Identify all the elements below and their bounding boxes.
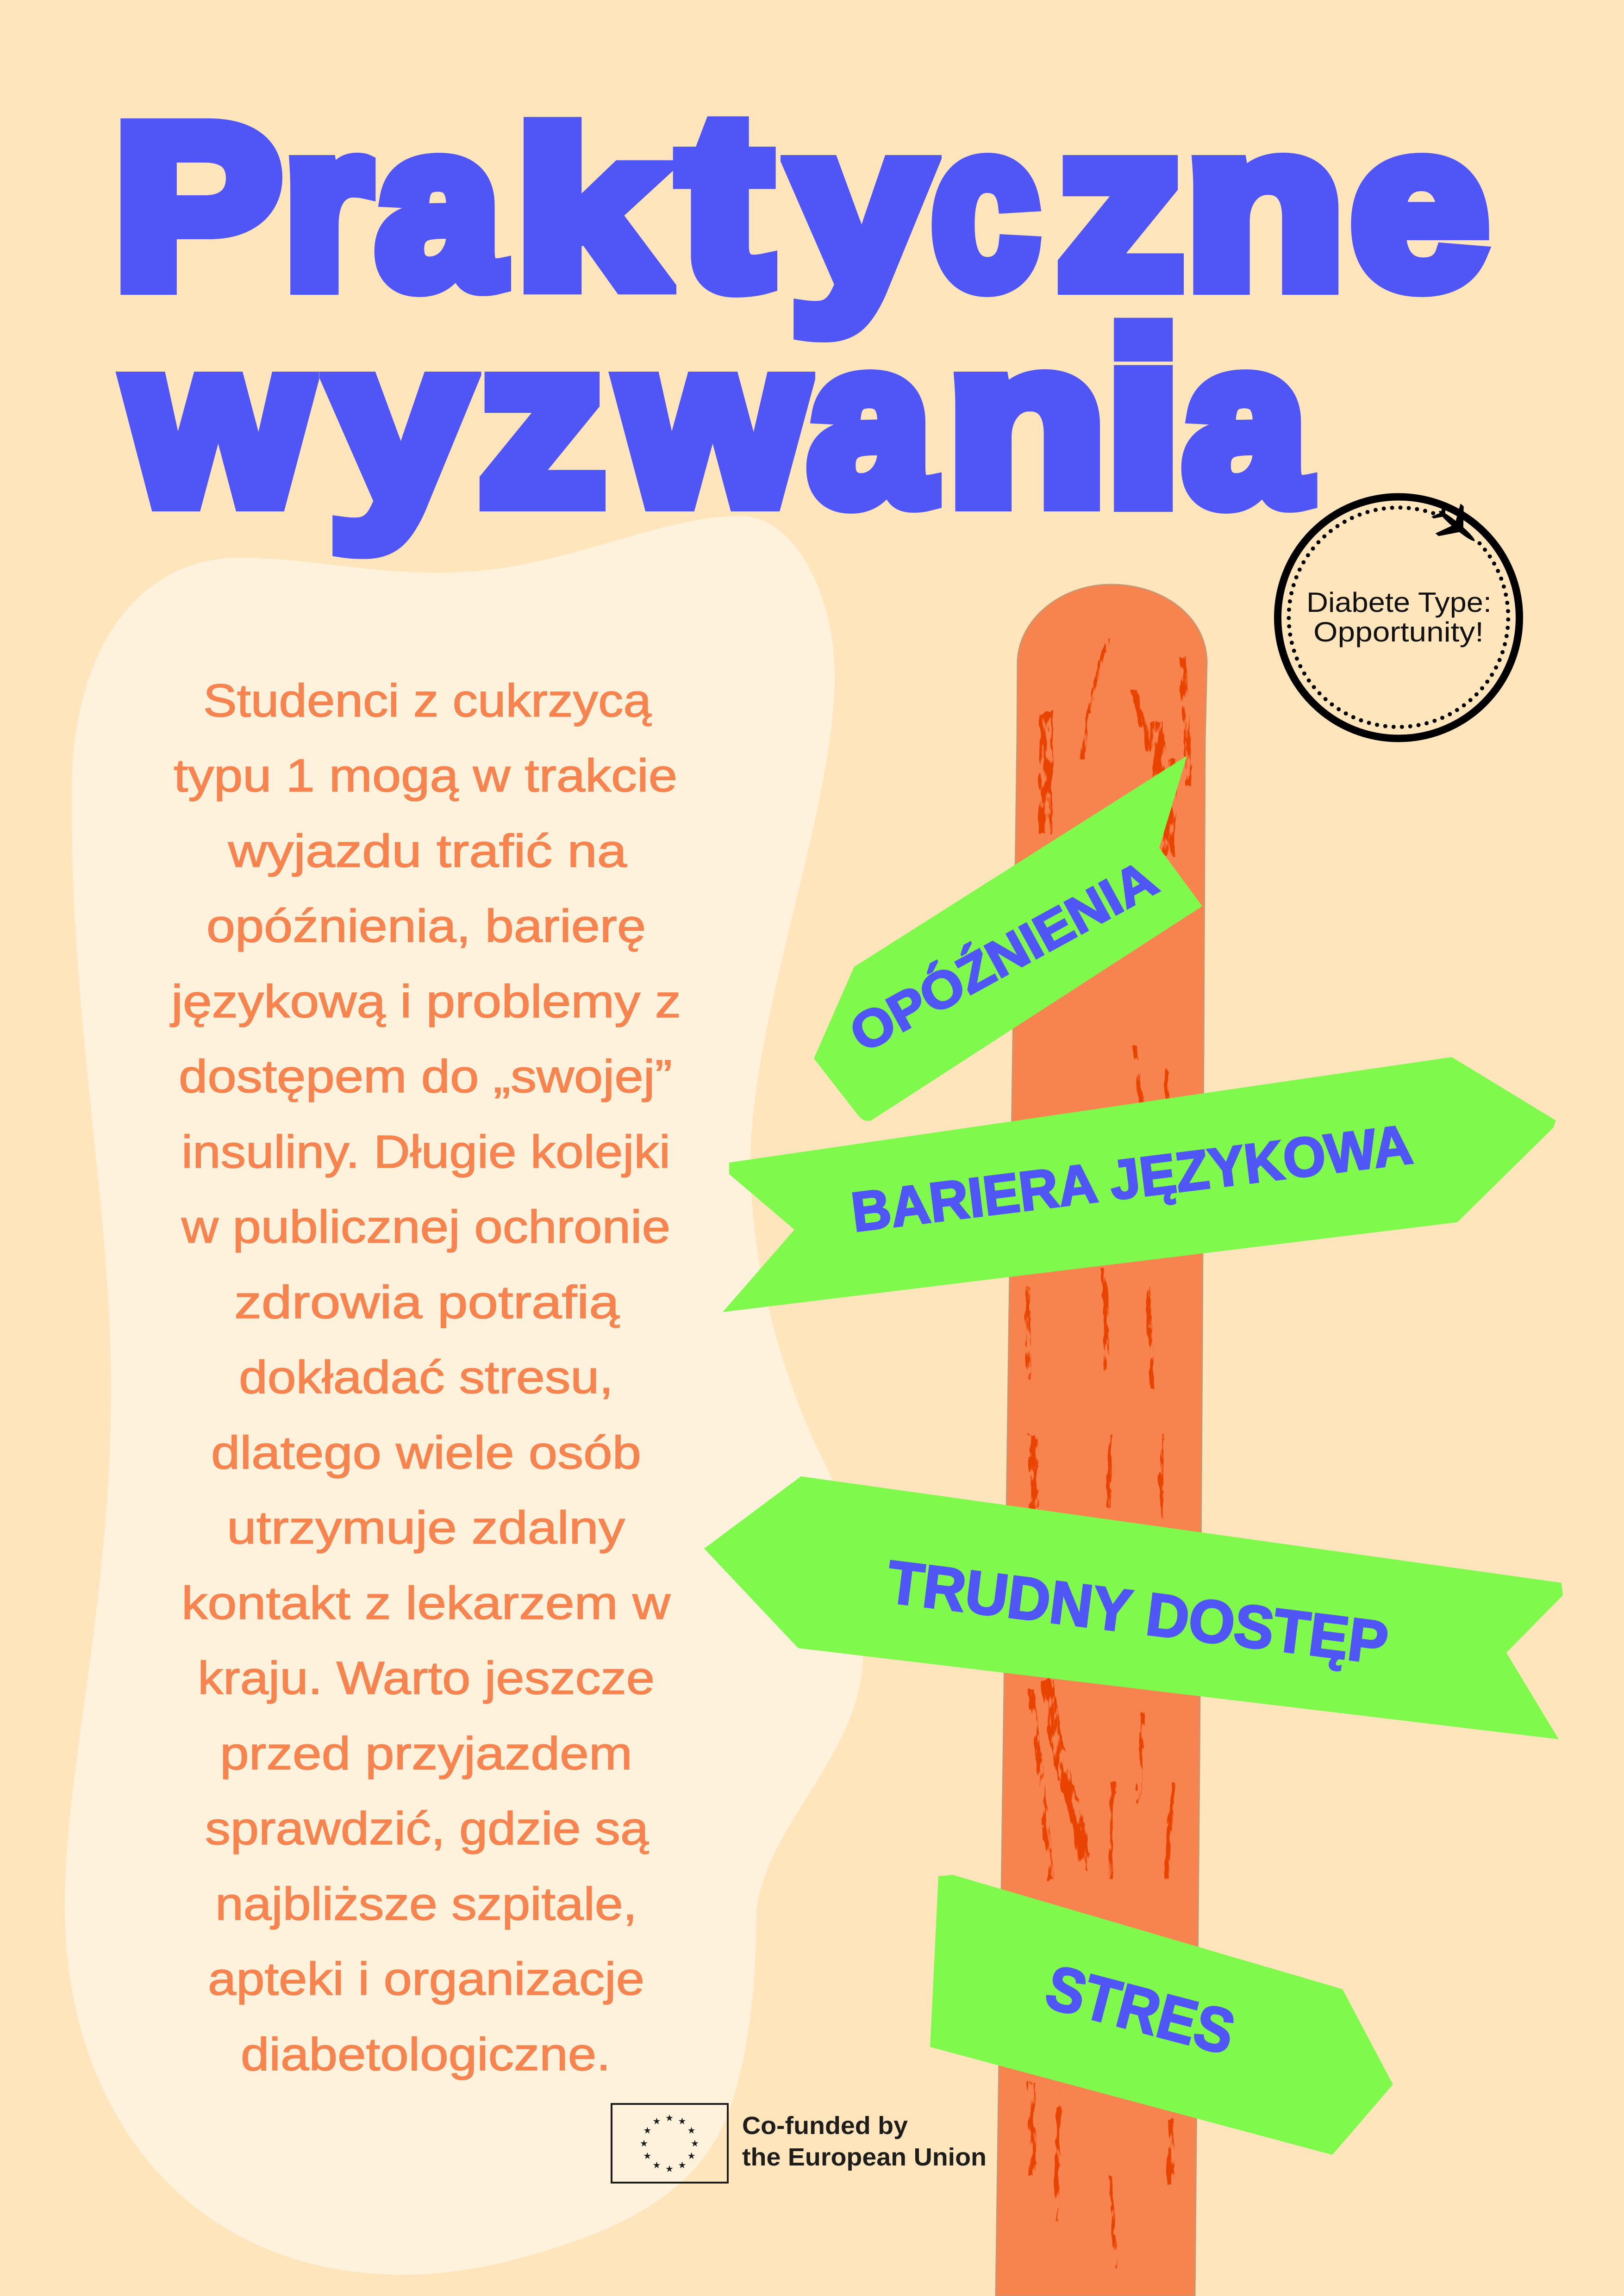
EU co-funded logo: ★ [640,2138,648,2149]
body text block: diabetologiczne. [241,2028,611,2080]
body text block: apteki i organizacje [208,1953,644,2005]
arrow sign: STRES: STRES [1039,1952,1242,2068]
body text block: kontakt z lekarzem w [181,1577,671,1629]
icon: airplane [1425,495,1487,556]
body text block: językową i problemy z [170,976,681,1027]
title: t [681,65,770,338]
EU co-funded logo [612,2104,987,2183]
title: a [1184,295,1307,551]
EU co-funded logo: ★ [678,2159,686,2171]
EU co-funded logo: ★ [665,2112,674,2123]
EU co-funded logo: Co-funded by [742,2112,908,2140]
body text block [170,675,681,2080]
title [115,118,1490,550]
body text block: przed przyjazdem [220,1728,632,1780]
arrow sign: BARIERA JĘZYKOWA [723,1057,1556,1312]
title: y [791,78,930,335]
EU co-funded logo: ★ [643,2125,651,2136]
title: z [1058,78,1183,335]
title: r [284,78,370,335]
body text block: dostępem do „swojej” [179,1051,672,1102]
body text block: insuliny. Długie kolejki [181,1126,670,1178]
title: z [480,295,605,551]
title: n [1186,78,1344,335]
body text block: wyjazdu trafić na [228,825,627,877]
signpost: wooden post [996,585,1207,2296]
EU co-funded logo: ★ [687,2125,696,2136]
EU co-funded logo: ★ [653,2159,661,2171]
body text block: utrzymuje zdalny [227,1502,625,1554]
EU co-funded logo: ★ [687,2150,696,2161]
EU co-funded logo: ★ [643,2150,651,2161]
body text block: opóźnienia, barierę [206,900,646,952]
title: w [128,295,309,551]
EU co-funded logo: ★ [678,2116,686,2127]
panel: cream text blob [65,516,863,2275]
title: i [1106,285,1181,554]
title: w [621,295,805,551]
body text block: w publicznej ochronie [181,1201,670,1253]
badge: Diabete Type Opportunity: Diabete Type: [1306,587,1492,618]
title: a [809,295,931,551]
body text block: kraju. Warto jeszcze [198,1652,655,1704]
body text block: typu 1 mogą w trakcie [174,750,677,802]
arrow sign: TRUDNY DOSTĘP: TRUDNY DOSTĘP [884,1548,1392,1677]
title: y [330,295,469,551]
badge: Diabete Type Opportunity: Opportunity! [1313,616,1484,647]
title: e [1351,78,1487,335]
EU co-funded logo: the European Union [742,2143,987,2171]
EU co-funded logo: ★ [665,2163,674,2174]
body text block: zdrowia potrafią [234,1276,619,1328]
body text block: dokładać stresu, [239,1351,613,1403]
title: k [516,87,664,333]
body text block: Studenci z cukrzycą [203,675,651,727]
arrow sign: STRES [930,1875,1393,2155]
badge: Diabete Type Opportunity [1278,495,1519,739]
title: n [948,295,1106,551]
arrow sign: TRUDNY DOSTĘP [704,1476,1563,1739]
arrow sign: OPÓŹNIENIA [814,756,1202,1121]
EU co-funded logo: ★ [691,2138,699,2149]
arrow sign: BARIERA JĘZYKOWA: BARIERA JĘZYKOWA [848,1113,1416,1244]
title: a [377,78,501,335]
title: c [932,78,1038,335]
body text block: najbliższe szpitale, [215,1878,637,1930]
title: P [114,78,281,335]
EU co-funded logo: ★ [653,2116,661,2127]
arrow sign: OPÓŹNIENIA: OPÓŹNIENIA [840,849,1166,1063]
body text block: sprawdzić, gdzie są [205,1803,649,1854]
body text block: dlatego wiele osób [211,1427,641,1479]
